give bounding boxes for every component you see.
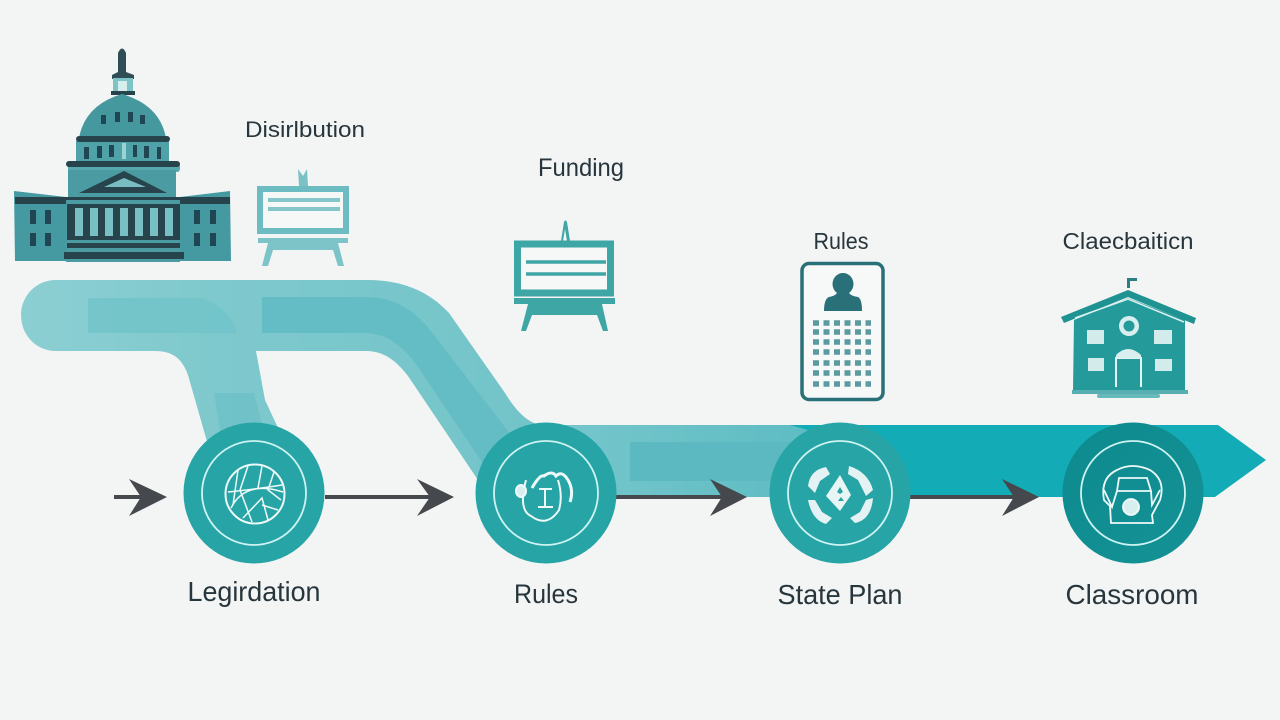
roof	[1061, 290, 1196, 324]
band inner shade: lower channel block	[630, 442, 790, 481]
mast	[298, 169, 308, 186]
flag	[1127, 278, 1137, 288]
capitol cornice	[15, 197, 230, 204]
arrow: state plan to classroom	[908, 479, 1039, 516]
clock	[1119, 316, 1139, 336]
heading: Classification: Claecbaiticn	[1062, 228, 1194, 254]
capitol colonnade	[64, 200, 184, 262]
node ring	[202, 441, 306, 545]
board lines	[526, 262, 606, 274]
roof highlight	[1075, 299, 1184, 322]
label: Rules: Rules	[514, 579, 578, 609]
diamond centre	[837, 487, 844, 501]
node: rules	[476, 422, 616, 564]
node disc	[476, 422, 616, 564]
band segment: upper curved channel with branches	[21, 280, 545, 480]
icon: capitol building	[14, 48, 231, 262]
capitol dome	[79, 94, 166, 138]
band inner shade: right curve	[262, 297, 515, 465]
flow band: funding pipeline	[21, 280, 1266, 497]
icon: globe	[226, 464, 284, 524]
icon: rules card	[802, 264, 883, 400]
label: State Plan: State Plan	[778, 579, 902, 610]
band inner shade: branch	[214, 393, 264, 442]
node ring	[494, 441, 598, 545]
icon: distribution board	[258, 169, 348, 266]
icon: funding board	[514, 220, 615, 331]
band segment: dark teal arrow to classroom	[790, 425, 1266, 497]
heading: Funding: Funding	[538, 154, 624, 182]
node disc	[1062, 422, 1204, 564]
capitol spire	[112, 48, 134, 79]
hands	[808, 466, 873, 524]
capitol pediment	[79, 171, 167, 193]
node ring	[1081, 441, 1185, 545]
capitol left wing	[14, 191, 66, 261]
band inner shade: left block	[88, 298, 236, 333]
node: legislation	[184, 422, 324, 564]
person	[824, 273, 862, 311]
icon: armchair	[1103, 466, 1162, 523]
node: classroom	[1062, 422, 1204, 564]
capitol dome windows	[101, 112, 145, 124]
arrow: rules to state plan	[615, 479, 747, 516]
heading: Distribution: Disirlbution	[245, 117, 365, 142]
base	[1072, 390, 1188, 398]
card outline	[802, 264, 883, 400]
band segment: lower light channel	[520, 425, 815, 497]
capitol upper tier	[66, 161, 180, 200]
house body	[1073, 298, 1185, 392]
capitol right wing	[180, 191, 231, 261]
heading: Rules: Rules	[814, 228, 868, 254]
icon: hands around diamond	[808, 466, 873, 524]
easel	[514, 298, 615, 331]
windows	[1087, 330, 1172, 371]
icon: face with gavel	[516, 473, 572, 521]
board lines	[268, 200, 340, 209]
arrow: entry	[114, 479, 167, 516]
frame	[518, 244, 610, 293]
mast	[561, 220, 570, 241]
node ring	[788, 441, 892, 545]
arrow: legislation to rules	[325, 479, 454, 516]
node disc	[770, 422, 910, 564]
capitol lantern	[111, 78, 135, 95]
diamond	[826, 475, 851, 511]
label: Classroom: Classroom	[1066, 579, 1198, 610]
table of cells	[813, 323, 871, 384]
node: state plan	[770, 422, 910, 564]
capitol drum	[76, 136, 170, 163]
door	[1116, 349, 1141, 387]
node disc	[184, 422, 324, 564]
easel	[258, 238, 348, 266]
icon: schoolhouse	[1061, 278, 1196, 398]
label: Legislation: Legirdation	[188, 576, 320, 607]
frame	[260, 189, 346, 231]
